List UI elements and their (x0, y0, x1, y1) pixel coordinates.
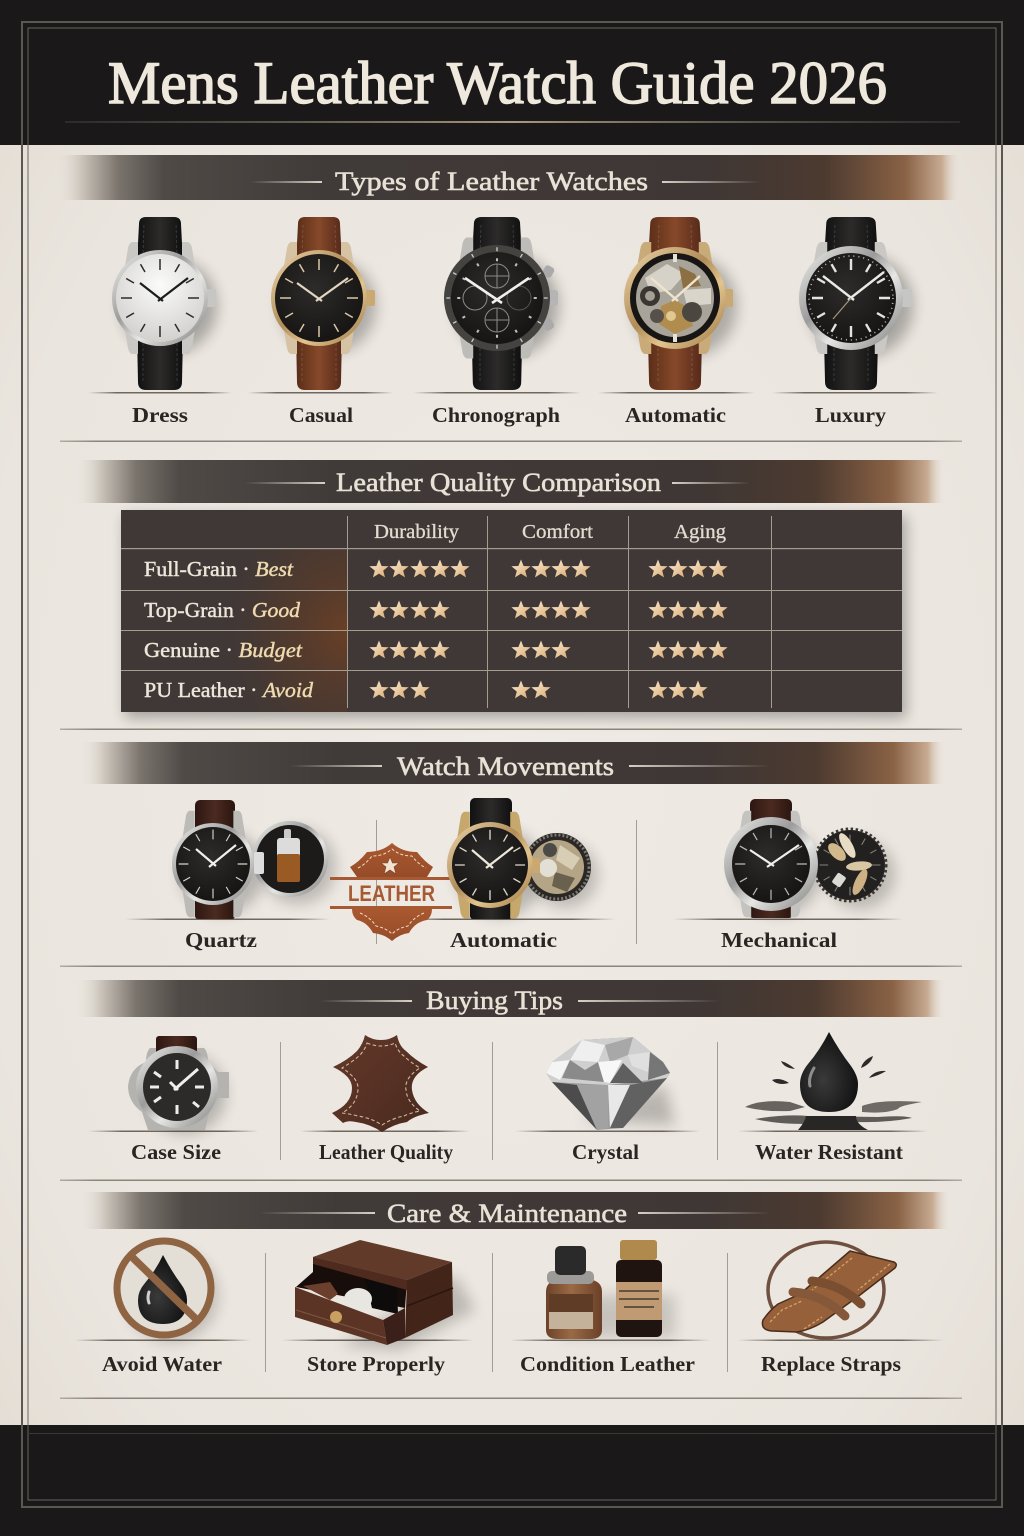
column headers: Aging (674, 521, 726, 543)
icon: leather patch (332, 1035, 429, 1132)
section: types of leather watches (55, 155, 960, 427)
row: top-grain (144, 598, 728, 622)
section: watch movements (80, 742, 945, 952)
row: full-grain (144, 557, 728, 581)
icon: avoid water (117, 1241, 218, 1342)
label: automatic: Automatic (625, 403, 726, 427)
section: leather quality comparison (75, 460, 945, 718)
banner: types (55, 155, 960, 200)
baselines: types (88, 392, 938, 394)
heading: types: Types of Leather Watches (335, 167, 648, 196)
watch: luxury (799, 217, 913, 390)
row: full-grain: Full-Grain · Best (144, 557, 294, 581)
row: pu leather: PU Leather · Avoid (144, 678, 314, 702)
icon: replacement strap (762, 1242, 896, 1338)
label: crystal: Crystal (572, 1140, 639, 1164)
label: replace straps: Replace Straps (761, 1352, 901, 1376)
icon: crystal diamond (546, 1037, 675, 1130)
watch: casual (271, 217, 376, 390)
label: automatic movement: Automatic (450, 928, 557, 952)
badge: leather emblem: LEATHER (348, 881, 435, 906)
movement: quartz watch with battery (172, 800, 336, 919)
label: store properly: Store Properly (307, 1352, 446, 1376)
label: casual: Casual (289, 403, 353, 427)
icon: water drop with splash (745, 1032, 922, 1130)
comparison table (121, 510, 906, 718)
label: water resistant: Water Resistant (755, 1140, 903, 1164)
label: quartz: Quartz (185, 928, 257, 952)
label: mechanical: Mechanical (721, 928, 837, 952)
label: chronograph: Chronograph (432, 403, 560, 427)
baselines and dividers: movements (125, 820, 903, 944)
movement: automatic watch with rotor (447, 798, 598, 919)
label: case size: Case Size (131, 1140, 221, 1164)
badge: leather emblem (330, 843, 452, 941)
heading: care: Care & Maintenance (387, 1199, 627, 1228)
heading: leather quality: Leather Quality Comparison (336, 468, 661, 497)
heading: movements: Watch Movements (397, 752, 614, 781)
heading: buying tips: Buying Tips (426, 986, 563, 1015)
column headers: Durability (374, 521, 459, 543)
banner: care (80, 1192, 950, 1229)
banner: buying tips (75, 980, 945, 1017)
dividers and baselines: tips (88, 1042, 928, 1160)
header band (0, 0, 1024, 145)
footer band (0, 1425, 1024, 1536)
title: Mens Leather Watch Guide 2026 (108, 50, 887, 116)
watch: automatic (624, 217, 737, 390)
movement: mechanical watch with gears (724, 799, 895, 918)
watch: chronograph (444, 217, 559, 390)
banner: movements (80, 742, 945, 784)
row: pu leather (144, 678, 708, 702)
label: avoid water: Avoid Water (102, 1352, 222, 1376)
label: luxury: Luxury (815, 403, 887, 427)
label: dress: Dress (132, 403, 188, 427)
section: care and maintenance (75, 1192, 950, 1376)
column headers (374, 521, 726, 543)
label: condition leather: Condition Leather (520, 1352, 695, 1376)
icon: watch storage box (295, 1240, 475, 1350)
banner: leather quality (75, 460, 945, 503)
row: top-grain: Top-Grain · Good (144, 598, 301, 622)
dividers and baselines: care (75, 1253, 943, 1372)
column headers: Comfort (522, 521, 593, 543)
row: genuine (144, 638, 728, 662)
section: buying tips (75, 980, 945, 1164)
icon: leather conditioner bottles (546, 1240, 675, 1339)
watch: dress (112, 217, 217, 390)
row: genuine: Genuine · Budget (144, 638, 303, 662)
label: leather quality: Leather Quality (319, 1140, 453, 1164)
icon: case size watch (128, 1036, 229, 1134)
